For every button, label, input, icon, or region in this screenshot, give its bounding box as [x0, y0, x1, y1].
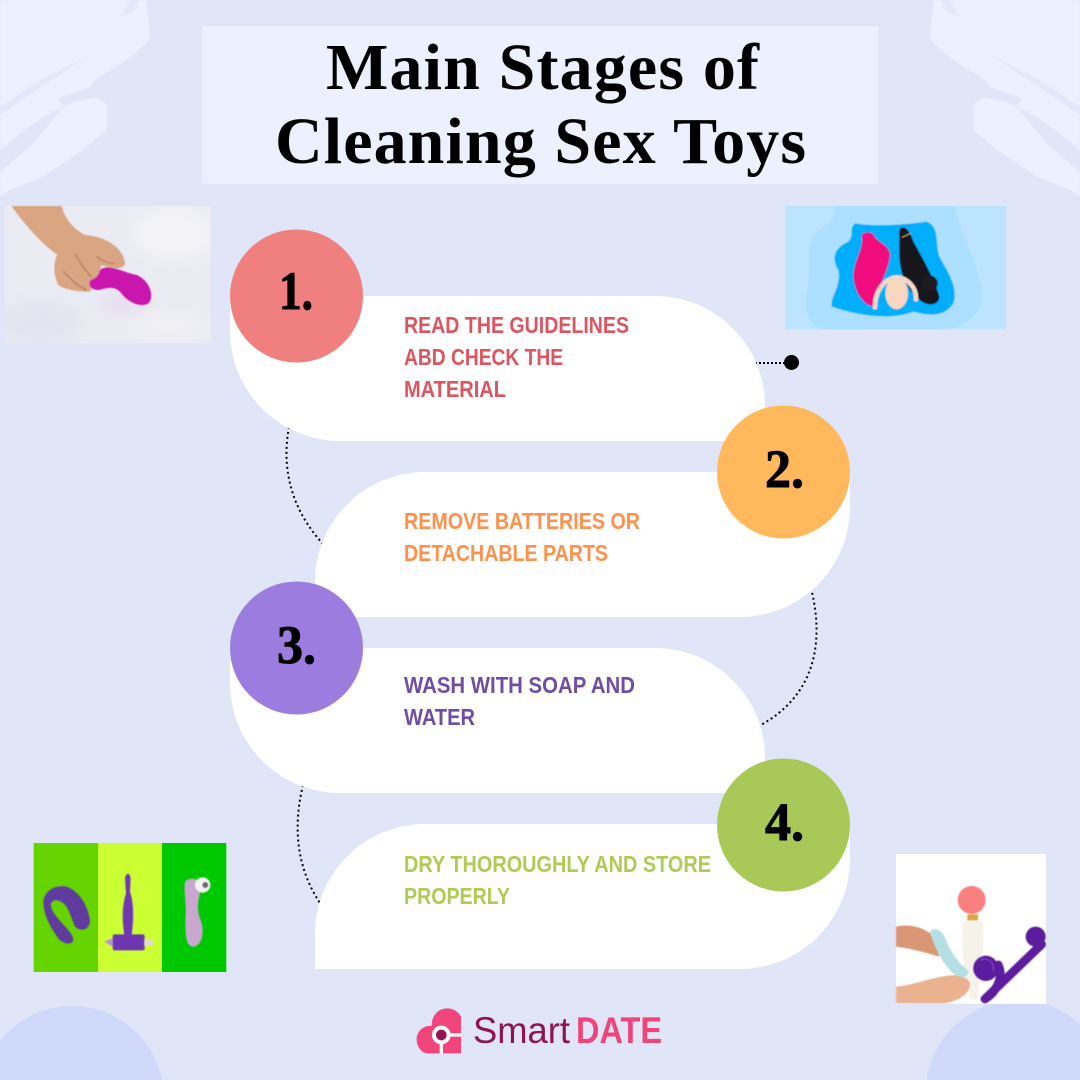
- number badge 2: 2.: [765, 439, 804, 499]
- ribbon 4: [315, 824, 850, 969]
- step 4: [315, 758, 850, 969]
- connector: dotted arc 2 to 3: [759, 588, 817, 726]
- step 2 text: DETACHABLE PARTS: [404, 540, 608, 566]
- ribbon 1: [230, 296, 765, 441]
- step 3 text: [404, 672, 635, 730]
- number badge 1: 1.: [279, 261, 313, 321]
- number badge 2: [717, 406, 850, 538]
- step 1 text: MATERIAL: [404, 376, 506, 402]
- logo: SmartDATE: [417, 1008, 662, 1053]
- step 1 text: READ THE GUIDELINES: [404, 312, 629, 338]
- brush decoration: top left: [0, 0, 150, 197]
- number badge 4: 4.: [765, 792, 804, 852]
- step 2 text: [404, 508, 640, 566]
- title: [202, 26, 878, 184]
- connector: dotted line with dot: [755, 355, 799, 370]
- connector: dotted arc 3 to 4: [298, 785, 320, 903]
- title: Main Stages of: [326, 31, 760, 104]
- step 1: [230, 230, 765, 441]
- number badge 3: [230, 582, 363, 714]
- step 1 text: [404, 312, 629, 402]
- step 4 text: DRY THOROUGHLY AND STORE: [404, 851, 711, 877]
- step 2: [315, 406, 850, 617]
- number badge 1: [230, 230, 363, 362]
- icon: heart with circuit node: [417, 1008, 461, 1053]
- number badge 4: [717, 758, 850, 892]
- ribbon 2: [315, 472, 850, 617]
- step 4 text: PROPERLY: [404, 883, 510, 909]
- step 1 text: ABD CHECK THE: [404, 344, 563, 370]
- step 2 text: REMOVE BATTERIES OR: [404, 508, 640, 534]
- photo: hand holding magenta toy: [0, 206, 217, 347]
- brush decoration: top right: [930, 0, 1080, 197]
- logo: SmartDATE: DATE: [576, 1010, 662, 1051]
- step 3 text: WASH WITH SOAP AND: [404, 672, 635, 698]
- photo: pink and black toys on blue: [785, 206, 1006, 329]
- number badge 3: 3.: [277, 615, 316, 675]
- title: Cleaning Sex Toys: [275, 105, 806, 178]
- ribbon 3: [230, 648, 765, 793]
- logo: SmartDATE: Smart: [473, 1010, 571, 1051]
- step 4 text: [404, 851, 711, 909]
- connector: dotted arc 1 to 2: [286, 427, 323, 544]
- step 3 text: WATER: [404, 704, 475, 730]
- decorative circle: bottom right: [927, 1000, 1080, 1080]
- photo: hands, wand and purple toy on white: [896, 854, 1046, 1004]
- photo: three purple toys on green stripes: [34, 843, 226, 972]
- decorative circle: bottom left: [0, 1006, 162, 1080]
- step 3: [230, 582, 765, 793]
